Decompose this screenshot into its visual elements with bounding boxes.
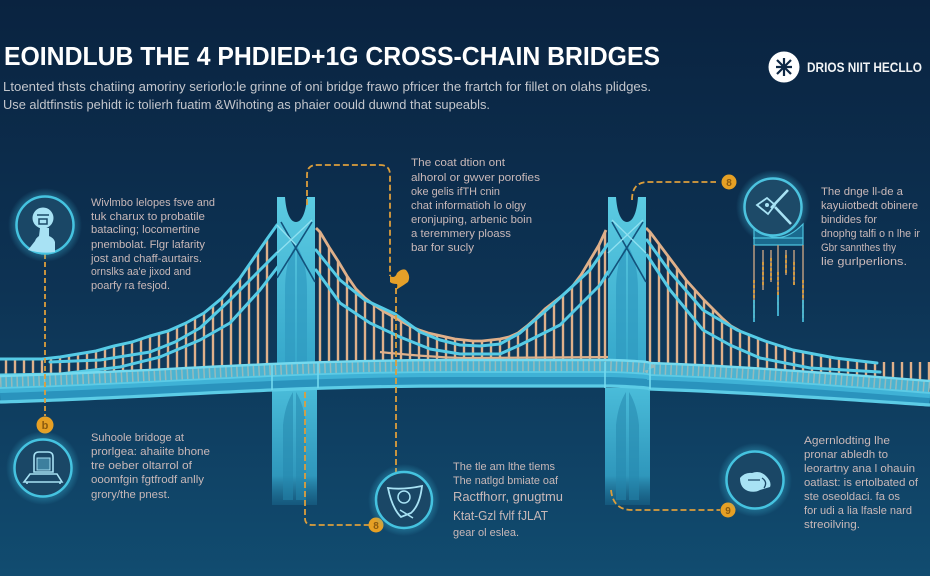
text block: bottom left: grory/the pnest. bbox=[91, 489, 170, 501]
icon: key tool with hanging bridge bbox=[736, 170, 810, 322]
subtitle bbox=[3, 79, 651, 112]
text block: top centre: bar for sucly bbox=[411, 242, 475, 254]
text block: top right bbox=[821, 186, 920, 268]
connector: tower to shield badge bbox=[305, 392, 370, 525]
text block: left top bbox=[90, 197, 215, 292]
text block: bottom left: tre oeber oltarrol of bbox=[91, 460, 193, 472]
subtitle: Use aldtfinstis pehidt ic tolierh fuatim &Wihoting as phaier oould duwnd that supeabls. bbox=[3, 97, 490, 112]
text block: bottom centre: The natlgd bmiate oaf bbox=[453, 475, 559, 487]
text block: top centre: alhorol or gwver porofies bbox=[411, 172, 541, 184]
text block: top centre: oke gelis ifTH cnin bbox=[411, 186, 500, 198]
text block: top right: The dnge ll-de a bbox=[821, 186, 904, 198]
text block: bottom centre: gear ol eslea. bbox=[453, 527, 519, 539]
text block: left top: pnembolat. Flgr lafarity bbox=[91, 239, 205, 251]
text block: top centre: eronjuping, arbenic boin bbox=[411, 214, 532, 226]
text block: top right: dnophg talfi o n lhe ir bbox=[821, 228, 920, 240]
text block: top right: lie gurlperlions. bbox=[821, 256, 907, 268]
icon: cloud shape bbox=[718, 443, 792, 517]
badge: shield connector bbox=[368, 518, 384, 532]
text block: left top: jost and chaff-aurtairs. bbox=[90, 253, 202, 265]
badge: top right connector bbox=[722, 174, 736, 190]
bridge illustration bbox=[0, 197, 930, 505]
icon: orange hook bbox=[390, 269, 409, 290]
text block: left top: poarfy ra fesjod. bbox=[91, 280, 170, 292]
deck body bbox=[0, 374, 930, 399]
text block: bottom left: ooomfgin fgtfrodf anlly bbox=[91, 474, 205, 486]
text block: top right: Gbr sannthes thy bbox=[821, 242, 896, 254]
text block: top right: bindides for bbox=[821, 214, 877, 226]
deck railing bbox=[0, 360, 930, 405]
text block: bottom left bbox=[91, 432, 210, 501]
text block: bottom right: ste oseoldaci. fa os bbox=[804, 491, 901, 503]
text block: bottom right: oatlast: is ertolbated of bbox=[804, 477, 919, 489]
badge: shield connector: 8 bbox=[373, 521, 379, 532]
connector: left icon to badge bbox=[44, 254, 46, 416]
text block: bottom right: streoilving. bbox=[804, 519, 860, 531]
badge: left top connector bbox=[36, 416, 54, 434]
text block: bottom centre: The tle am lthe tlems bbox=[453, 461, 555, 473]
icon: shield bbox=[368, 464, 440, 536]
badge: bottom right connector: 9 bbox=[725, 506, 731, 517]
text block: left top: tuk charux to probatile bbox=[91, 211, 205, 223]
text block: bottom right: leorartny ana l ohauin bbox=[804, 463, 915, 475]
title: EOINDLUB THE 4 PHDIED+1G CROSS-CHAIN BRIDGES bbox=[4, 41, 660, 71]
text block: bottom left: prorlgea: ahaiite bhone bbox=[91, 446, 210, 458]
badge: top right connector: 8 bbox=[726, 178, 732, 189]
connector: right tower to top badge bbox=[632, 182, 716, 200]
connector: tower to hook bbox=[307, 165, 390, 276]
text block: left top: batacling; locomertine bbox=[91, 224, 200, 236]
left tower upper bbox=[277, 197, 315, 364]
text block: bottom right: for udi a lia lfasle nard bbox=[804, 505, 912, 517]
icon: device bbox=[6, 431, 80, 505]
text block: top centre: a teremmery ploass bbox=[411, 228, 512, 240]
blue cables bbox=[0, 225, 880, 375]
text block: bottom right bbox=[804, 435, 919, 531]
text block: top centre: chat informatioh lo olgy bbox=[411, 200, 526, 212]
text block: left top: ornslks aa'e jixod and bbox=[91, 266, 191, 278]
lower tower legs bbox=[272, 388, 650, 505]
icon: person bbox=[8, 188, 82, 262]
text block: top centre: The coat dtion ont bbox=[411, 157, 505, 169]
right tower upper bbox=[608, 197, 646, 364]
text block: bottom left: Suhoole bridoge at bbox=[91, 432, 184, 444]
subtitle: Ltoented thsts chatiing amoriny seriorlo:le grinne of oni bridge frawo pfricer the frartch for fillet on olahs plidges. bbox=[3, 79, 651, 94]
text block: left top: Wivlmbo lelopes fsve and bbox=[91, 197, 215, 209]
text block: bottom right: pronar abledh to bbox=[804, 449, 888, 461]
text block: bottom centre bbox=[453, 461, 563, 539]
badge: bottom right connector bbox=[720, 502, 736, 518]
connector: right tower to bottom badge bbox=[611, 490, 720, 510]
orange main cables bbox=[316, 228, 740, 358]
text block: bottom right: Agernlodting lhe bbox=[804, 435, 890, 447]
text block: top centre bbox=[411, 157, 541, 254]
text block: bottom centre: Ractfhorr, gnugtmu bbox=[453, 489, 563, 504]
text block: top right: kayuiotbedt obinere bbox=[821, 200, 918, 212]
connector: hook to shield icon bbox=[395, 288, 397, 472]
hangers bbox=[6, 232, 929, 388]
badge: left top connector: b bbox=[42, 420, 49, 432]
text block: bottom centre: Ktat-Gzl fvlf fJLAT bbox=[453, 508, 548, 523]
logo bbox=[768, 52, 922, 82]
